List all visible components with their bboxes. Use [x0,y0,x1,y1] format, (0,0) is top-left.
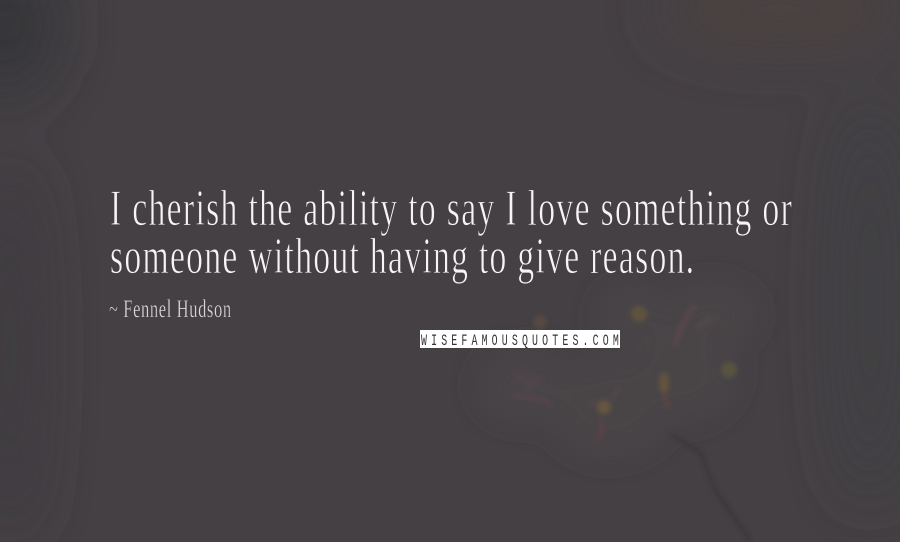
blossoms [480,285,755,455]
watermark badge: WISEFAMOUSQUOTES.COM [421,332,619,350]
quote text: someone without having to give reason. [110,229,694,285]
author attribution: ~ Fennel Hudson [109,295,231,323]
quote text: I cherish the ability to say I love something or [110,181,792,237]
quote text [110,181,792,285]
